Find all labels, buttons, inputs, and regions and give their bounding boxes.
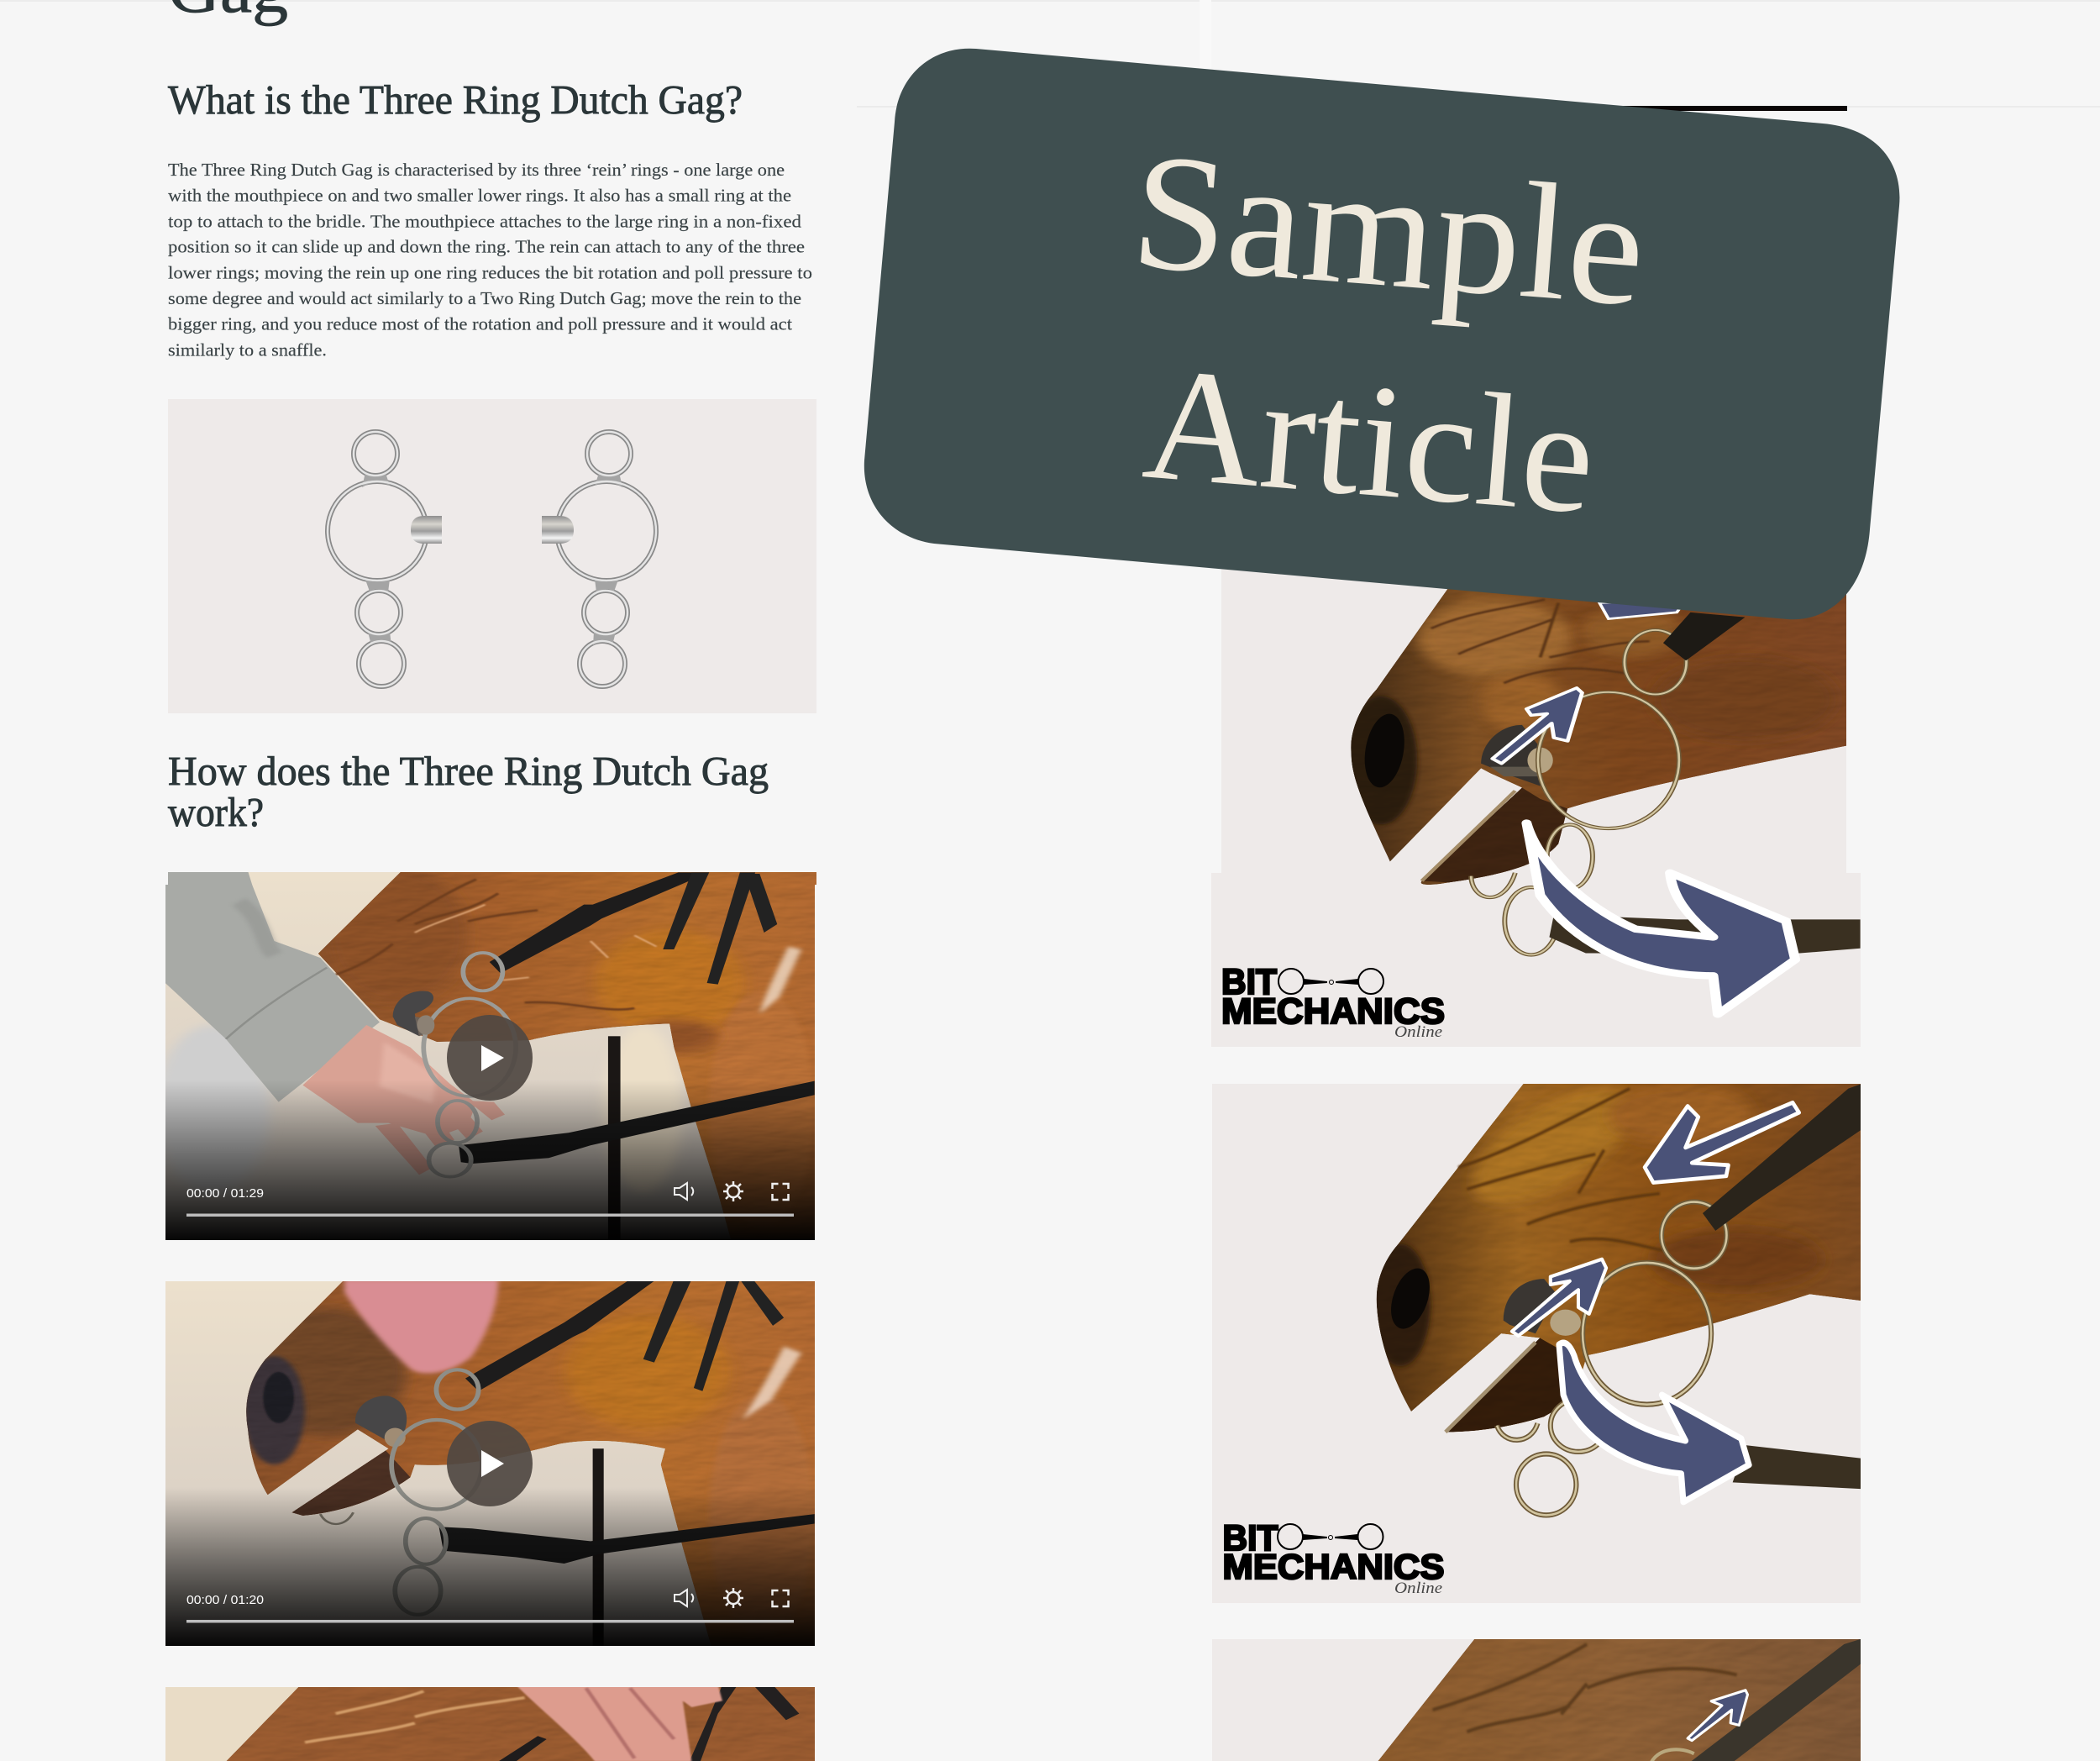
logo: Bit Mechanics Online (photo 2): MECHANICS <box>1223 1547 1445 1586</box>
text block: description of the bit: The Three Ring Dutch Gag is characterised by its three ‘rein’ rings - one large one <box>168 160 785 180</box>
hand <box>302 1025 505 1175</box>
heading: How does the Three Ring Dutch Gag work: work? <box>168 789 264 835</box>
text block: description of the bit: position so it can slide up and down the ring. The rein can attach to any of the three <box>168 237 805 257</box>
icon: settings <box>723 1588 743 1608</box>
bit rings <box>1497 1202 1727 1515</box>
banner text: Article <box>1138 333 1601 548</box>
arrow: big curved <box>1559 1343 1749 1502</box>
bit rings <box>391 1369 482 1615</box>
bit rings <box>1471 630 1687 954</box>
icon: volume <box>675 1183 693 1200</box>
logo: Bit Mechanics Online (photo 2) <box>1223 1518 1445 1597</box>
blurred hand <box>344 1280 498 1374</box>
horse body <box>239 1280 819 1647</box>
text block: description of the bit: lower rings; moving the rein up one ring reduces the bit rotation and poll pressure to <box>168 262 812 282</box>
logo: Bit Mechanics Online (photo 1): BIT <box>1221 962 1277 1002</box>
cheek guard <box>355 1396 407 1439</box>
video 3: cropped horse with hand <box>165 1685 816 1761</box>
panel: three ring bit product image <box>168 399 816 713</box>
cheek guard <box>393 991 433 1036</box>
video 2: horse head with bit <box>165 1280 819 1647</box>
icon: settings <box>723 1181 743 1201</box>
arrow: small up <box>1512 1259 1606 1336</box>
text block: description of the bit: similarly to a snaffle. <box>168 339 327 360</box>
horse body <box>314 868 819 1241</box>
video controls: 00:00 / 01:29 <box>186 1186 264 1201</box>
arrow: top <box>1645 1102 1799 1183</box>
arrow: small up <box>1688 1690 1748 1741</box>
text block: description of the bit: bigger ring, and you reduce most of the rotation and poll pressure and it would act <box>168 314 792 334</box>
bridle strap <box>1703 1084 1861 1231</box>
arrow: small up <box>1493 688 1582 764</box>
banner text <box>1126 118 1651 548</box>
icon: fullscreen <box>773 1590 788 1606</box>
cheek guard <box>1504 1279 1557 1333</box>
icon: left bit cheek <box>328 432 442 686</box>
icon: volume <box>675 1590 693 1606</box>
straps and reins <box>465 1280 656 1391</box>
panel: photo 3 cropped horse head <box>1212 1637 1861 1761</box>
play button <box>447 1015 533 1101</box>
banner text: Sample <box>1126 118 1651 341</box>
heading: How does the Three Ring Dutch Gag work: How does the Three Ring Dutch Gag <box>168 748 769 794</box>
logo: Bit Mechanics Online (photo 1): MECHANICS <box>1221 991 1445 1032</box>
video 1: hand holding the bit on the horse model <box>155 868 819 1241</box>
arrow: top <box>1598 602 1681 620</box>
banner: Sample Article <box>864 49 1899 619</box>
text block: description of the bit: top to attach to the bridle. The mouthpiece attaches to the large ring in a non-fixed <box>168 212 801 232</box>
horse head <box>1377 1637 1861 1761</box>
bit rings <box>423 953 516 1177</box>
rein and strap <box>1663 612 1746 660</box>
straps and reins <box>490 872 709 973</box>
video controls <box>186 1588 794 1623</box>
panel: photo 1 horse head with force arrows <box>1211 570 1861 1047</box>
heading: How does the Three Ring Dutch Gag work <box>168 748 769 835</box>
arrow: big curved <box>1526 823 1795 1014</box>
horse head <box>1345 574 1852 889</box>
rein <box>1733 1445 1861 1489</box>
text block: description of the bit <box>168 160 812 360</box>
logo: Bit Mechanics Online (photo 2): Online <box>1394 1580 1442 1597</box>
play button <box>447 1421 533 1506</box>
icon: fullscreen <box>773 1184 788 1200</box>
cheek guard <box>1481 725 1541 786</box>
video controls: 00:00 / 01:20 <box>186 1593 264 1607</box>
text block: description of the bit: with the mouthpiece on and two smaller lower rings. It also has a small ring at the <box>168 185 791 205</box>
panel: photo 2 horse head with force arrows <box>1212 1065 1861 1603</box>
icon: right bit cheek <box>542 432 656 686</box>
logo: Bit Mechanics Online (photo 1): Online <box>1394 1023 1442 1041</box>
logo: Bit Mechanics Online (photo 2): BIT <box>1223 1518 1278 1559</box>
video controls <box>186 1181 794 1217</box>
heading: What is the Three Ring Dutch Gag: What is the Three Ring Dutch Gag? <box>168 76 743 123</box>
bridle strap <box>1690 1639 1861 1761</box>
logo: Bit Mechanics Online (photo 1) <box>1221 962 1445 1041</box>
sleeve <box>165 871 380 1102</box>
text block: description of the bit: some degree and would act similarly to a Two Ring Dutch Gag; move the rein to the <box>168 288 801 308</box>
horse head <box>1371 1065 1861 1437</box>
